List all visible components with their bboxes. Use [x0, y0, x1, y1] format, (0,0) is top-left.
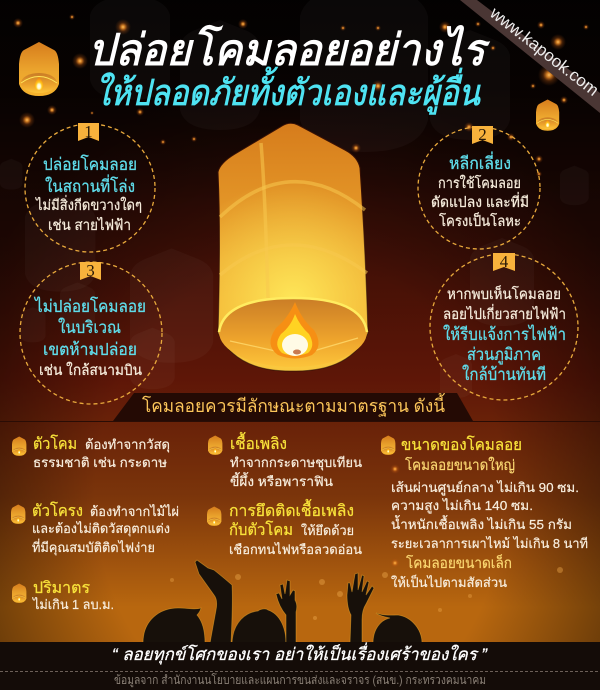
text block: volume: ไม่เกิน 1 ลบ.ม.	[32, 597, 114, 612]
flame	[270, 302, 319, 358]
text block: lantern body: ตัวโคม	[33, 434, 77, 453]
ribbon: www.kapook.com	[460, 0, 600, 113]
heading band: standards: โคมลอยควรมีลักษณะตามมาตรฐาน ดังนี้	[142, 393, 445, 417]
silhouettes: people with raised hands	[143, 560, 422, 643]
footer bar	[0, 642, 600, 690]
icon: lantern	[208, 435, 222, 455]
text block: lantern size	[381, 435, 588, 590]
title	[88, 25, 490, 115]
text block: lantern frame: ที่มีคุณสมบัติติดไฟง่าย	[32, 539, 155, 556]
panel: tip 2: โครงเป็นโลหะ	[439, 211, 521, 230]
icon: lantern top right	[536, 99, 559, 131]
text block: lantern size: ระยะเวลาการเผาไหม้ ไม่เกิน 8 นาที	[391, 536, 588, 551]
text block: lantern frame	[11, 501, 179, 556]
text block: fuel: เชื้อเพลิง	[230, 432, 287, 453]
panel: tip 1: ปล่อยโคมลอย	[43, 154, 137, 174]
panel: tip 4: ใกล้บ้านทันที	[462, 364, 546, 384]
text block: fuel: ทำจากกระดาษชุบเทียน	[230, 455, 362, 471]
text block: lantern frame: และต้องไม่ติดวัสดุตกแต่ง	[32, 521, 170, 537]
text block: lantern size: ขนาดของโคมลอย	[401, 435, 522, 454]
text block: lantern size: โคมลอยขนาดเล็ก	[406, 553, 512, 572]
text block: lantern size: เส้นผ่านศูนย์กลาง ไม่เกิน 90 ซม.	[391, 480, 579, 496]
text block: fuel attachment: เชือกทนไฟหรือลวดอ่อน	[229, 542, 362, 557]
text block: lantern size: ความสูง ไม่เกิน 140 ซม.	[391, 498, 533, 514]
text block: lantern body: ต้องทำจากวัสดุ	[85, 437, 170, 453]
title: ให้ปลอดภัยทั้งตัวเองและผู้อื่น	[95, 66, 481, 115]
panel: tip 4: หากพบเห็นโคมลอย	[447, 284, 561, 303]
icon: lantern	[381, 435, 395, 455]
text block: lantern body: ธรรมชาติ เช่น กระดาษ	[33, 455, 167, 470]
text block: lantern body	[12, 434, 170, 470]
icon: lantern	[207, 506, 221, 526]
text block: volume	[12, 580, 114, 612]
panel: tip 2	[418, 125, 540, 249]
ribbon: www.kapook.com: www.kapook.com	[486, 3, 600, 100]
text block: fuel: ขี้ผึ้ง หรือพาราฟิน	[230, 472, 333, 489]
text block: lantern size: โคมลอยขนาดใหญ่	[405, 456, 515, 474]
title: ปล่อยโคมลอยอย่างไร	[88, 25, 490, 75]
text block: fuel attachment: ให้ยึดด้วย	[301, 523, 354, 538]
panel: tip 3: เช่น ใกล้สนามบิน	[39, 361, 142, 379]
source: ข้อมูลจาก สำนักงานนโยบายและแผนการขนส่งและจราจร (สนข.) กระทรวงคมนาคม	[114, 673, 486, 688]
panel: tip 1	[25, 122, 155, 252]
text block: fuel attachment	[207, 499, 362, 557]
badge 3	[80, 261, 101, 280]
text block: fuel attachment: การยึดติดเชื้อเพลิง	[229, 499, 354, 520]
text block: volume: ปริมาตร	[33, 580, 90, 597]
panel: tip 4: ส่วนภูมิภาค	[467, 345, 541, 365]
text block: lantern size: น้ำหนักเชื้อเพลิง ไม่เกิน 55 กรัม	[391, 515, 572, 532]
icon: lantern	[12, 583, 26, 603]
panel: tip 3	[20, 261, 162, 404]
text block: lantern frame: ต้องทำจากไม้ไผ่	[90, 504, 179, 519]
badge 4: 4	[500, 252, 509, 271]
icon: lantern	[12, 436, 26, 456]
text block: lantern frame: ตัวโครง	[32, 501, 83, 520]
panel: tip 4: ลอยไปเกี่ยวสายไฟฟ้า	[443, 304, 566, 323]
text block: fuel attachment: กับตัวโคม	[229, 520, 293, 539]
badge 3: 3	[86, 261, 95, 280]
text block: lantern size: ให้เป็นไปตามสัดส่วน	[391, 573, 507, 590]
big lantern	[218, 123, 368, 371]
badge 1: 1	[84, 122, 93, 141]
panel: tip 4: ให้รีบแจ้งการไฟฟ้า	[443, 324, 566, 344]
panel: tip 4	[430, 252, 578, 400]
quote: “ ลอยทุกข์โศกของเรา อย่าให้เป็นเรื่องเศร้าของใคร ”	[112, 642, 488, 665]
panel: tip 3: ในบริเวณ	[58, 317, 121, 337]
panel: tip 1: เช่น สายไฟฟ้า	[48, 216, 131, 234]
panel: tip 2: ดัดแปลง และที่มี	[431, 192, 529, 211]
panel: tip 3: ไม่ปล่อยโคมลอย	[33, 296, 146, 316]
heading band: standards	[0, 393, 600, 422]
text block: fuel	[208, 432, 362, 489]
panel: tip 2: การใช้โคมลอย	[438, 174, 521, 192]
panel: tip 3: เขตห้ามปล่อย	[43, 340, 137, 359]
panel: tip 1: ในสถานที่โล่ง	[45, 174, 135, 196]
panel: tip 1: ไม่มีสิ่งกีดขวางใดๆ	[35, 195, 142, 214]
icon: lantern top left	[19, 42, 59, 96]
icon: lantern	[11, 504, 25, 524]
panel: tip 2: หลีกเลี่ยง	[449, 151, 511, 173]
badge 2: 2	[478, 125, 487, 144]
badge 4	[493, 252, 515, 271]
